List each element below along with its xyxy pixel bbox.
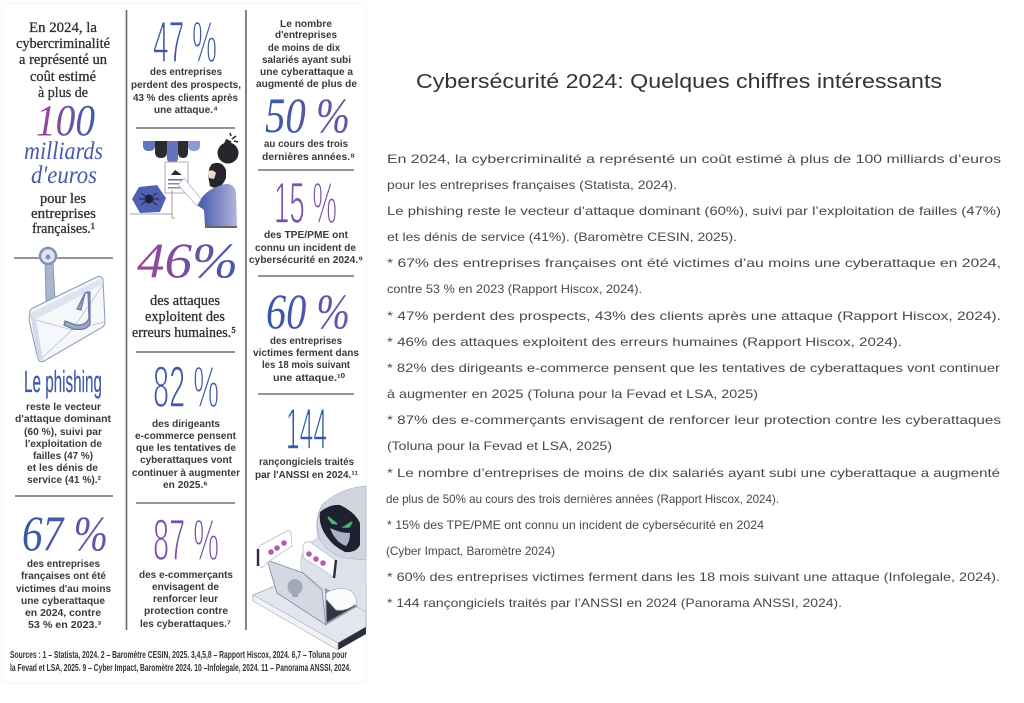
paragraph: 46%: * 46% des attaques exploitent des erreurs humaines (Rapport Hiscox, 2024).: [387, 335, 902, 349]
paragraph: 60%: * 60% des entreprises victimes ferment dans les 18 mois suivant une attaque (Infolegale, 2024).: [387, 570, 1000, 584]
icon: phishing hook and envelope: [29, 248, 105, 362]
text block: small business intro: de moins de dix: [268, 42, 340, 54]
paragraph: 15%: * 15% des TPE/PME ont connu un incident de cybersécurité en 2024: [387, 518, 764, 532]
icon: hacker at laptop: [253, 486, 366, 650]
text block: 46% description: exploitent des: [145, 309, 225, 325]
text block: 60 % description: des entreprises: [270, 335, 342, 347]
paragraph: 87%: * 87% des e-commerçants envisagent de renforcer leur protection contre les cyberattaques: [387, 413, 1001, 427]
stat: 67 %: 67 %: [22, 505, 108, 561]
panel: infographic: 15 %: [274, 171, 337, 236]
panel: infographic: 144: [286, 397, 327, 462]
sources: Sources : 1 – Statista, 2024. 2 – Baromètre CESIN, 2025. 3,4,5,8 – Rapport Hiscox, 2024. 6,7 – Toluna pour: [10, 650, 347, 661]
paragraph: 87%: (Toluna pour la Fevad et LSA, 2025): [387, 439, 612, 453]
title: Cybersécurité 2024: Quelques chiffres intéressants: [416, 71, 942, 93]
text block: 67 % description: [16, 558, 111, 631]
paragraph: cost: En 2024, la cybercriminalité a représenté un coût estimé à plus de 100 milliards d’euros: [387, 152, 1001, 166]
paragraph: 15%: (Cyber Impact, Baromètre 2024): [386, 544, 555, 558]
text block: 87 % description: [139, 569, 233, 630]
text block: 47 % description: 43 % des clients après: [133, 92, 238, 104]
text block: 67 % description: françaises ont été: [21, 570, 106, 582]
paragraph: 67%: * 67% des entreprises françaises ont été victimes d’au moins une cyberattaque en 2024,: [387, 256, 1001, 270]
text block: 47 % description: des entreprises: [150, 66, 222, 78]
paragraph: 82%: [387, 361, 1000, 401]
text block: 100 milliards: 100: [36, 96, 95, 145]
text block: 144 description: rançongiciels traités: [259, 456, 354, 468]
panel: infographic: 82 %: [153, 355, 219, 420]
text block: 100 milliards: pour les: [40, 191, 86, 207]
text block: 100 milliards: coût estimé: [30, 69, 96, 85]
text block: 67 % description: des entreprises: [27, 558, 100, 570]
panel: infographic: Le phishing: [24, 364, 102, 399]
text block: 82 % description: [132, 418, 240, 491]
text block: 144 description: par l'ANSSI en 2024.¹¹: [255, 469, 358, 481]
text block: small business intro: augmenté de plus de: [256, 78, 357, 90]
text block: phishing details: d'attaque dominant: [15, 413, 111, 425]
text block: 82 % description: continuer à augmenter: [132, 467, 240, 479]
text block: phishing details: [15, 401, 111, 486]
paragraph: 15%: [386, 518, 764, 558]
text block: 100 milliards: d'euros: [31, 162, 97, 189]
text block: 15 % description: des TPE/PME ont: [264, 229, 348, 241]
text block: 87 % description: envisagent de: [152, 581, 219, 593]
text block: small business intro: Le nombre: [280, 18, 332, 30]
paragraph: 47%: * 47% perdent des prospects, 43% des clients après une attaque (Rapport Hiscox, 2024).: [387, 309, 1001, 323]
text block: phishing details: l'exploitation de: [25, 438, 102, 450]
sources: la Fevad et LSA, 2025. 9 – Cyber Impact, Baromètre 2024. 10 –Infolegale, 2024. 11 – Panorama ANSSI, 2024.: [10, 663, 351, 674]
icon: shop attacked, man with bomb: [130, 133, 238, 228]
paragraph: cost: pour les entreprises françaises (Statista, 2024).: [387, 178, 677, 192]
stat: 60 %: 60 %: [266, 283, 350, 339]
text block: 50 % description: [262, 138, 355, 163]
stat: 50 %: 50 %: [265, 87, 350, 143]
text block: 144 description: [255, 456, 358, 481]
text block: 67 % description: en 2024, contre: [25, 607, 101, 619]
text block: phishing details: service (41 %).²: [27, 474, 101, 486]
text block: phishing details: failles (47 %): [33, 450, 93, 462]
text block: 100 milliards: [16, 20, 110, 237]
paragraph: cost: [387, 152, 1001, 192]
text block: 60 % description: une attaque.¹⁰: [273, 372, 346, 384]
text block: phishing details: (60 %), suivi par: [24, 426, 102, 438]
text block: 67 % description: une cyberattaque: [21, 595, 105, 607]
text block: 50 % description: dernières années.⁸: [262, 151, 355, 163]
text block: 100 milliards: milliards: [24, 138, 103, 165]
text block: 46% description: des attaques: [150, 293, 220, 309]
paragraph: phishing: [387, 204, 1001, 244]
paragraph: 87%: [387, 413, 1001, 453]
text block: 87 % description: renforcer leur: [153, 593, 218, 605]
text block: 46% description: [132, 293, 236, 341]
text block: 100 milliards: cybercriminalité: [16, 36, 110, 52]
paragraph: 144: * 144 rançongiciels traités par l’ANSSI en 2024 (Panorama ANSSI, 2024).: [387, 596, 842, 610]
text block: 60 % description: les 18 mois suivant: [262, 359, 350, 371]
text block: small business intro: une cyberattaque a: [260, 66, 353, 78]
text block: phishing details: et les dénis de: [27, 462, 98, 474]
text block: 15 % description: cybersécurité en 2024.⁹: [249, 254, 363, 266]
text block: 82 % description: que les tentatives de: [136, 442, 236, 454]
text block: 82 % description: en 2025.⁶: [163, 479, 208, 491]
text block: 15 % description: [249, 229, 363, 266]
paragraph: 67%: contre 53 % en 2023 (Rapport Hiscox, 2024).: [387, 282, 642, 296]
text block: 47 % description: perdent des prospects,: [131, 79, 241, 91]
text block: article body: [386, 152, 1001, 610]
text block: small business intro: salariés ayant subi: [262, 54, 351, 66]
text block: 46% description: erreurs humaines.⁵: [132, 325, 236, 341]
text block: 100 milliards: En 2024, la: [29, 20, 97, 36]
paragraph: 50%: * Le nombre d’entreprises de moins de dix salariés ayant subi une cyberattaque a augmenté: [387, 466, 1000, 480]
paragraph: 50%: [386, 466, 1000, 506]
text block: 15 % description: connu un incident de: [255, 242, 356, 254]
panel: infographic: 87 %: [153, 508, 219, 573]
text block: 100 milliards: entreprises: [31, 206, 96, 222]
paragraph: 82%: à augmenter en 2025 (Toluna pour la Fevad et LSA, 2025): [387, 387, 758, 401]
text block: 60 % description: victimes ferment dans: [253, 347, 359, 359]
text block: 67 % description: victimes d'au moins: [16, 583, 111, 595]
paragraph: phishing: et les dénis de service (41%). (Baromètre CESIN, 2025).: [387, 230, 737, 244]
panel: infographic: 47 %: [153, 10, 217, 75]
text block: 82 % description: cyberattaques vont: [140, 454, 232, 466]
text block: 82 % description: des dirigeants: [152, 418, 220, 430]
text block: phishing details: reste le vecteur: [26, 401, 101, 413]
text block: 87 % description: protection contre: [144, 605, 228, 617]
text block: 87 % description: des e-commerçants: [139, 569, 233, 581]
panel: infographic: [2, 3, 366, 683]
text block: 50 % description: au cours des trois: [264, 138, 348, 150]
text block: 47 % description: [131, 66, 241, 116]
text block: 67 % description: 53 % en 2023.³: [28, 619, 102, 631]
text block: 100 milliards: françaises.¹: [32, 221, 95, 237]
sources: [10, 650, 351, 674]
text block: 47 % description: une attaque.⁴: [154, 104, 218, 116]
text block: small business intro: [256, 18, 357, 90]
stat: 46%: 46%: [137, 232, 238, 288]
text block: 100 milliards: a représenté un: [19, 52, 107, 68]
text block: 82 % description: e-commerce pensent: [135, 430, 236, 442]
paragraph: 67%: [387, 256, 1001, 296]
text block: 100 milliards: à plus de: [38, 85, 88, 101]
paragraph: 50%: de plus de 50% au cours des trois dernières années (Rapport Hiscox, 2024).: [386, 492, 779, 506]
paragraph: phishing: Le phishing reste le vecteur d’attaque dominant (60%), suivi par l’exploitation de failles (47%): [387, 204, 1001, 218]
text block: 87 % description: les cyberattaques.⁷: [140, 618, 231, 630]
text block: 60 % description: [253, 335, 359, 384]
paragraph: 82%: * 82% des dirigeants e-commerce pensent que les tentatives de cyberattaques vont continuer: [387, 361, 1000, 375]
text block: small business intro: d'entreprises: [275, 29, 337, 41]
